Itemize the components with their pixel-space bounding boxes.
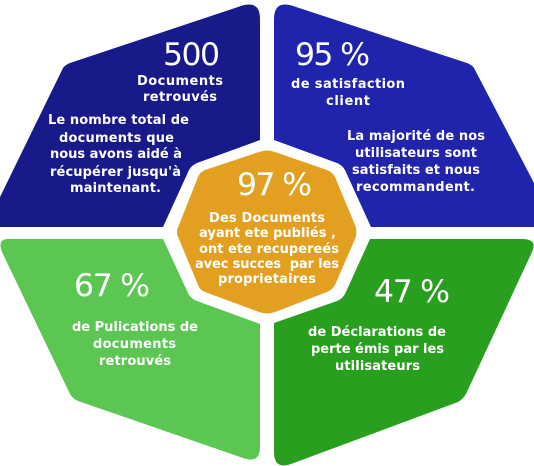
text block: central description: ayant ete publiés , [199,226,336,241]
text block: central description: avec succes par les [195,257,339,272]
panel: satisfaction client (top right) [274,5,534,227]
panel shape: navy [0,5,260,227]
number: 95 %: 95 % [295,37,370,73]
number: 67 %: 67 % [74,268,150,304]
text block: total description: nous avons aidé à [50,147,182,162]
text block: déclarations description [308,325,446,374]
panel: publications (bottom left) [0,239,260,460]
text block: déclarations description: utilisateurs [335,359,420,374]
panel shape: blue [274,5,534,227]
panel shape: light green [0,239,260,460]
text block: publications description: documents [93,337,176,352]
text block: déclarations description: perte émis par les [311,342,444,357]
text block: total description: maintenant. [70,181,161,196]
text block: publications description: de Pulications de [72,320,198,335]
text block: central description: ont ete recupereés [199,242,339,257]
heading: documents retrouvés: Documents [137,74,223,89]
text block: total description: récupérer jusqu'à [50,165,181,180]
panel: central octagon [177,150,356,314]
number: 500: 500 [163,37,220,73]
text block: majority description [347,129,485,195]
text block: central description: proprietaires [218,272,316,287]
text block: majority description: La majorité de nos [347,129,485,144]
heading: de satisfaction client [291,77,405,109]
text block: central description: Des Documents [209,211,325,226]
heading: de satisfaction client: client [326,94,370,109]
heading: de satisfaction client: de satisfaction [291,77,405,92]
text block: majority description: utilisateurs sont [355,146,477,161]
text block: déclarations description: de Déclarations de [308,325,446,340]
heading: documents retrouvés: retrouvés [143,90,217,105]
text block: central description [195,211,339,287]
text block: total description [48,113,189,196]
text block: total description: Le nombre total de [48,113,189,128]
text block: publications description [72,320,198,369]
text block: majority description: recommandent. [356,180,475,195]
panel shape: dark green [274,239,534,466]
octagon shape: amber [177,150,356,314]
panel: documents retrouvés (top left) [0,5,260,227]
text block: total description: documents que [59,131,174,146]
text block: publications description: retrouvés [99,354,171,369]
number: 47 %: 47 % [374,274,450,310]
text block: majority description: satisfaits et nous [352,163,480,178]
number: 97 %: 97 % [237,167,312,203]
heading: documents retrouvés [137,74,223,105]
panel: déclarations (bottom right) [274,239,534,466]
